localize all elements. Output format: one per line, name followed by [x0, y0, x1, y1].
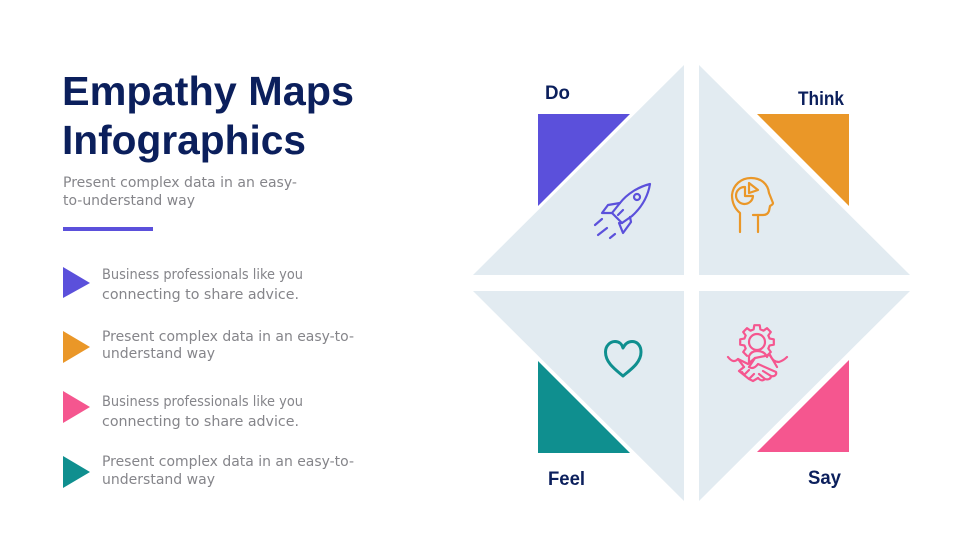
label: Think: Think [798, 89, 844, 110]
corner: Think [757, 114, 849, 206]
list item 3: Business professionals like you [102, 394, 303, 410]
list item 3: connecting to share advice. [102, 414, 299, 430]
list item 2 [63, 329, 354, 363]
icon: heart [606, 342, 641, 376]
list item 4: Present complex data in an easy-to- [102, 454, 354, 470]
panel: Think [699, 65, 910, 275]
label: Feel: Feel [548, 469, 585, 490]
icon: handshake with gear [728, 325, 787, 381]
label: Say: Say [808, 468, 841, 489]
title: Empathy Maps [62, 68, 354, 114]
label: Do: Do [545, 83, 570, 104]
icon: head with pie chart [732, 178, 773, 232]
list item 4: understand way [102, 472, 215, 488]
list item 1: connecting to share advice. [102, 287, 299, 303]
list item 1 [63, 267, 303, 303]
panel: Feel [473, 291, 684, 501]
subtitle [63, 175, 297, 209]
subtitle: to-understand way [63, 193, 195, 209]
list item 2: understand way [102, 346, 215, 362]
corner: Do [538, 114, 630, 206]
list item 1: Business professionals like you [102, 267, 303, 283]
corner: Feel [538, 361, 630, 453]
list item 4 [63, 454, 354, 488]
title: Infographics [62, 117, 306, 163]
list item 2: Present complex data in an easy-to- [102, 329, 354, 345]
accent divider [63, 227, 153, 231]
title [62, 68, 354, 163]
icon: rocket [595, 184, 650, 238]
panel: Do [473, 65, 684, 275]
panel: Say [699, 291, 910, 501]
list item 3 [63, 391, 303, 430]
corner: Say [757, 360, 849, 452]
subtitle: Present complex data in an easy- [63, 175, 297, 191]
